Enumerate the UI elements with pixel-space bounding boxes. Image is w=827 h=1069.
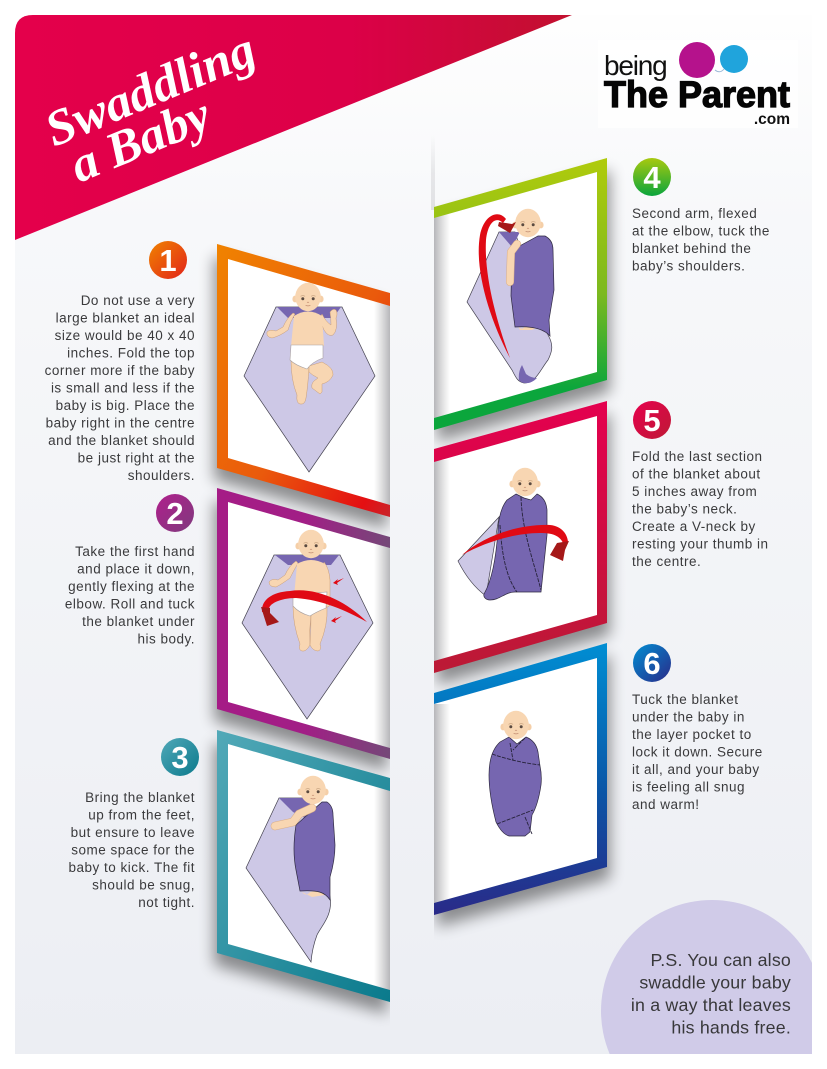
panel 2: step two illustration	[214, 488, 390, 771]
callout: P.S. circle: in a way that leaves	[631, 995, 791, 1015]
step 5 badge	[633, 401, 671, 439]
step 1 text: size would be 40 x 40	[55, 328, 195, 343]
step 4 text: at the elbow, tuck the	[632, 224, 770, 238]
title: a Baby	[62, 85, 219, 193]
step 3 text: but ensure to leave	[71, 825, 195, 840]
frame 1	[217, 244, 390, 517]
wrapped baby	[484, 468, 547, 600]
step 2 text	[65, 544, 195, 646]
step 3 text	[68, 790, 195, 910]
step 5 text: 5 inches away from	[632, 484, 757, 499]
step 6 text: it all, and your baby	[632, 762, 760, 777]
step 1 text: shoulders.	[128, 468, 195, 483]
step 4 text	[632, 206, 770, 274]
step 2 text: his body.	[137, 632, 195, 646]
step 1 text: large blanket an ideal	[56, 310, 195, 326]
logo: being The Parent: being	[604, 50, 667, 81]
panel 5: step five illustration	[434, 401, 610, 685]
step 3 badge	[161, 738, 199, 776]
step 3 text: up from the feet,	[88, 808, 195, 822]
step 3 text: should be snug,	[92, 878, 195, 892]
step 6 text: and warm!	[632, 797, 700, 812]
step 1 badge	[149, 241, 187, 279]
blanket flap	[458, 517, 499, 596]
frame 3	[217, 730, 390, 1002]
step 2 badge	[156, 494, 194, 532]
step 6 text: the layer pocket to	[632, 727, 752, 742]
panel 1: step one illustration	[214, 244, 390, 529]
callout: P.S. circle	[601, 900, 812, 1054]
step 1 text: is small and less if the	[51, 380, 195, 396]
frame 6	[434, 643, 607, 915]
step 2 text: and place it down,	[77, 562, 195, 576]
step 4 text: Second arm, flexed	[632, 206, 757, 221]
step 1 text: inches. Fold the top	[67, 346, 195, 360]
step 5 text: Create a V-neck by	[632, 519, 756, 534]
frame 4	[434, 158, 607, 430]
arrow: over shoulder	[479, 214, 516, 358]
step 5 text: of the blanket about	[632, 466, 761, 482]
wrapped baby	[510, 209, 554, 336]
wrapped baby	[275, 776, 335, 900]
wrapped baby	[489, 711, 541, 836]
step 2 badge: 2	[166, 496, 184, 531]
step 5 text: Fold the last section	[632, 449, 763, 464]
title banner	[15, 15, 572, 240]
step 5 text: the baby’s neck.	[632, 502, 737, 516]
logo: being The Parent	[598, 40, 798, 128]
baby	[267, 283, 337, 404]
logo: being The Parent: The Parent	[604, 74, 790, 115]
arrow: wrap across	[462, 525, 569, 561]
step 3 text: baby to kick. The fit	[68, 860, 195, 875]
step 6 text: is feeling all snug	[632, 780, 745, 794]
step 1 text: baby is big. Place the	[56, 398, 195, 413]
step 6 badge: 6	[643, 646, 661, 681]
title: Swaddling	[37, 20, 263, 157]
step 1 badge: 1	[159, 243, 177, 278]
step 5 text: resting your thumb in	[632, 536, 769, 552]
blanket	[242, 555, 373, 719]
frame 2	[217, 488, 390, 759]
frame 5	[434, 401, 607, 673]
step 6 text: lock it down. Secure	[632, 744, 763, 760]
step 2 text: elbow. Roll and tuck	[65, 596, 195, 612]
step 3 text: some space for the	[71, 842, 195, 858]
step 4 text: baby’s shoulders.	[632, 258, 745, 274]
step 4 badge: 4	[643, 160, 661, 195]
step 6 text: under the baby in	[632, 710, 745, 724]
step 3 text: not tight.	[138, 895, 195, 910]
step 1 text: corner more if the baby	[45, 363, 195, 378]
step 4 text: blanket behind the	[632, 241, 751, 256]
step 1 text: Do not use a very	[81, 293, 195, 308]
step 4 badge	[633, 158, 671, 196]
step 1 text	[45, 293, 195, 483]
step 6 text: Tuck the blanket	[632, 692, 739, 707]
step 3 text: Bring the blanket	[85, 790, 195, 805]
blanket	[244, 307, 375, 472]
step 6 text	[632, 692, 763, 812]
callout: P.S. circle: P.S. You can also	[650, 950, 791, 970]
step 5 badge: 5	[643, 403, 661, 438]
panel 6: step six illustration	[434, 643, 610, 927]
step 1 text: be just right at the	[78, 450, 195, 466]
logo: being The Parent: .com	[754, 111, 790, 128]
callout: P.S. circle: his hands free.	[671, 1018, 791, 1038]
step 5 text: the centre.	[632, 554, 701, 569]
arrow: tuck under	[261, 578, 367, 626]
callout: P.S. circle: swaddle your baby	[639, 972, 791, 992]
step 1 text: and the blanket should	[48, 433, 195, 448]
central fold shading	[431, 135, 435, 210]
panel 3: step three illustration	[214, 730, 390, 1014]
step 6 badge	[633, 644, 671, 682]
step 2 text: the blanket under	[82, 614, 195, 629]
step 1 text: baby right in the centre	[46, 416, 195, 430]
step 3 badge: 3	[171, 740, 189, 775]
baby	[269, 530, 330, 651]
step 2 text: gently flexing at the	[68, 579, 195, 594]
step 5 text	[632, 449, 769, 569]
step 2 text: Take the first hand	[75, 544, 195, 559]
blanket	[467, 232, 552, 383]
panel 4: step four illustration	[434, 158, 610, 442]
blanket	[246, 798, 331, 962]
